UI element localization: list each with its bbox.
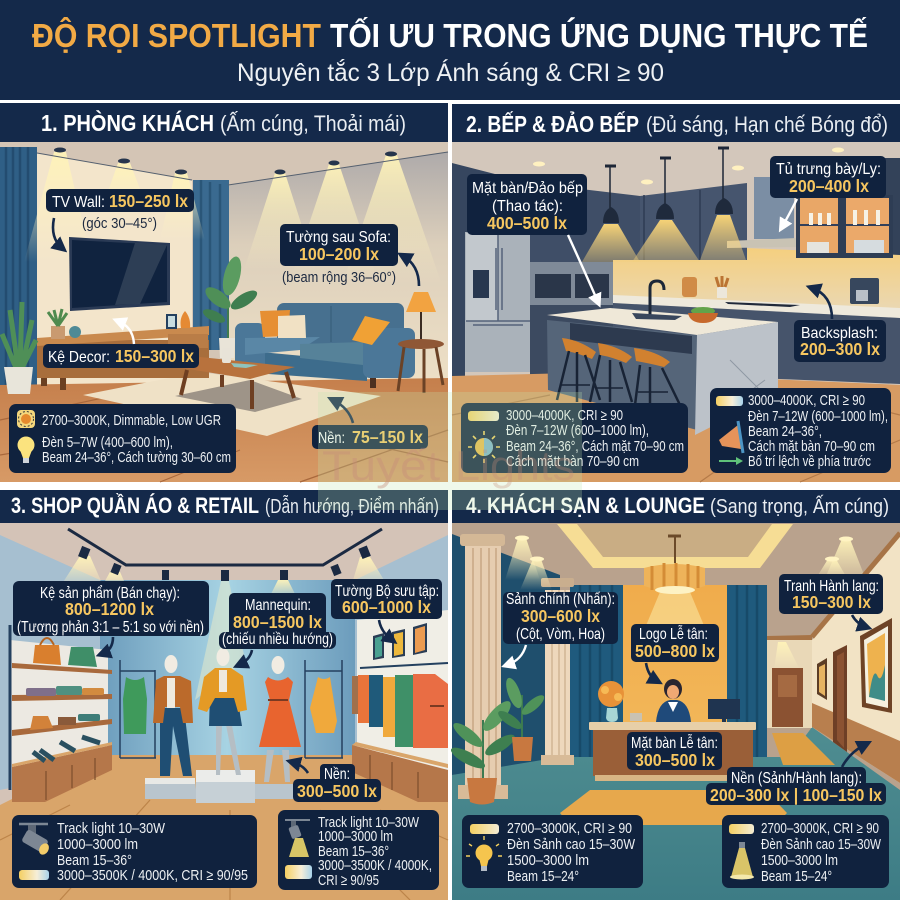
title: ĐỘ RỌI SPOTLIGHT <box>32 16 321 54</box>
info box 4 left: Đèn Sảnh cao 15–30W <box>507 836 636 853</box>
panel 2 header <box>452 104 900 142</box>
range hood <box>727 177 797 248</box>
reception desk <box>589 722 756 781</box>
label: reception desk: 300–500 lx <box>635 750 715 770</box>
info box 2 left: Cách mặtt bàn 70–90 cm <box>506 453 639 470</box>
info box 3 right: CRI ≥ 90/95 <box>318 872 379 889</box>
panel 1 header <box>0 103 448 142</box>
label: floor <box>312 425 428 449</box>
ceiling lights <box>533 148 844 184</box>
coffee table <box>175 348 302 412</box>
plant behind sofa <box>201 255 260 358</box>
arrow: display cabinet <box>782 199 797 227</box>
label: island top: 400–500 lx <box>487 213 567 233</box>
subtitle: Nguyên tắc 3 Lớp Ánh sáng & CRI ≥ 90 <box>237 58 664 87</box>
arrow: backsplash <box>812 288 832 319</box>
title <box>32 16 868 54</box>
label: display cabinet: 200–400 lx <box>789 176 869 196</box>
arrow: corridor art <box>852 615 866 627</box>
glass cabinet <box>796 195 893 258</box>
watermark <box>318 392 582 510</box>
info box 2 left: Đèn 7–12W (600–1000 lm), <box>506 422 649 439</box>
ceiling spots <box>505 536 870 590</box>
reception panel <box>623 585 727 722</box>
label: main lobby: Sảnh chính (Nhấn): <box>506 591 615 608</box>
walls <box>0 535 448 790</box>
icon: colour bar <box>729 824 754 834</box>
panel 1 header: (Ấm cúng, Thoải mái) <box>220 111 406 136</box>
info box 2 right <box>710 388 891 473</box>
label: TV wall: TV Wall: <box>52 194 105 211</box>
label: display cabinet <box>770 156 886 198</box>
clothes racks <box>120 660 343 758</box>
info box 2 right: Beam 24–36°, <box>748 423 822 440</box>
icon: track light <box>19 824 51 856</box>
label: backsplash: 200–300 lx <box>800 339 880 359</box>
island <box>547 308 778 435</box>
label: display cabinet: Tủ trưng bày/Ly: <box>776 161 881 178</box>
label: sofa wall: 100–200 lx <box>299 244 379 264</box>
label: decor shelf <box>43 344 199 368</box>
icon: spotlight beam <box>730 842 754 880</box>
info box 1: Beam 24–36°, Cách tường 30–60 cm <box>42 449 231 466</box>
info box 4 left: 2700–3000K, CRI ≥ 90 <box>507 820 632 837</box>
panel 3 header: 3. SHOP QUẦN ÁO & RETAIL <box>11 493 259 518</box>
label: decor shelf: 150–300 lx <box>115 346 194 366</box>
left wall <box>452 534 560 775</box>
watermark: Tuyết <box>322 442 440 489</box>
info box 2 left <box>461 403 688 473</box>
info box 2 left: Beam 24–36°, Cách mặt 70–90 cm <box>506 438 684 455</box>
shoe cabinet <box>12 737 112 802</box>
track rail and heads <box>58 529 390 700</box>
label: TV wall: 150–250 lx <box>109 191 188 211</box>
label: lobby floor: 200–300 lx | 100–150 lx <box>710 785 882 805</box>
info box 3 right: Track light 10–30W <box>318 814 420 831</box>
arrow: mannequin <box>239 650 252 665</box>
icon: beam angle <box>719 421 743 453</box>
ovens <box>530 262 613 375</box>
panel 3 header <box>0 490 448 523</box>
upper cabinets <box>452 158 900 376</box>
info box 3 left <box>12 815 257 888</box>
info box 2 right: 3000–4000K, CRI ≥ 90 <box>748 392 865 409</box>
label: main lobby <box>503 591 618 644</box>
label: floor: 75–150 lx <box>352 427 423 447</box>
label: product shelf: 800–1200 lx <box>65 599 154 619</box>
label: collection wall: 600–1000 lx <box>342 597 431 617</box>
label: mannequin: Mannequin: <box>245 597 311 614</box>
decor on console <box>48 309 190 339</box>
panel 1: living room <box>0 103 448 482</box>
icon: sun <box>468 431 500 463</box>
label: backsplash <box>794 320 886 362</box>
label: floor: Nền: <box>318 430 345 447</box>
info box 4 left: 1500–3000 lm <box>507 852 589 869</box>
lamp and side table <box>398 292 444 393</box>
icon: colour bar <box>285 865 312 879</box>
label: corridor art: 150–300 lx <box>792 592 871 612</box>
info box 4 left <box>462 815 643 888</box>
icon: colour bar <box>716 396 743 406</box>
info box 4 right <box>722 815 889 888</box>
info box 3 left: 1000–3000 lm <box>57 836 138 853</box>
panel 4 header <box>452 490 900 523</box>
hallway <box>767 533 900 783</box>
watermark: Lights <box>455 442 575 489</box>
columns <box>458 534 574 799</box>
curtains <box>570 585 767 757</box>
rug <box>560 790 787 825</box>
label: mannequin: 800–1500 lx <box>233 612 322 632</box>
label: corridor art <box>779 574 883 614</box>
label: product shelf <box>13 581 209 636</box>
flowers, phone, monitor <box>598 681 740 722</box>
TV console <box>37 326 209 390</box>
label: mannequin: (chiếu nhiều hướng) <box>222 631 333 648</box>
icon: bulb <box>466 836 502 871</box>
fridge <box>465 232 530 372</box>
floor <box>0 755 448 900</box>
label: sofa wall <box>280 224 398 286</box>
label: collection wall: Tường Bộ sưu tập: <box>335 583 439 600</box>
info box 1 <box>9 404 236 473</box>
arrow: lobby floor <box>842 744 866 767</box>
panel 1 header: 1. PHÒNG KHÁCH <box>41 109 214 136</box>
platforms <box>145 770 295 803</box>
label: decor shelf: Kệ Decor: <box>48 349 110 366</box>
label: reception logo <box>631 624 719 662</box>
floor <box>452 372 900 482</box>
label: reception desk: Mặt bàn Lễ tân: <box>631 733 718 752</box>
label: lobby floor <box>706 767 886 805</box>
wall art <box>373 623 427 660</box>
info box 1: 2700–3000K, Dimmable, Low UGR <box>42 412 221 429</box>
info box 3 right <box>278 810 439 890</box>
label: backsplash: Backsplash: <box>801 325 878 342</box>
icon: colour bar <box>470 824 499 834</box>
mannequin: man <box>153 655 193 776</box>
panel 2: kitchen <box>452 104 900 482</box>
backsplash items <box>682 276 879 304</box>
panel 2 header: 2. BẾP & ĐẢO BẾP <box>466 109 639 137</box>
arrow: product shelf <box>102 637 113 654</box>
pendant lights and beams <box>582 148 746 262</box>
info box 3 left: Track light 10–30W <box>57 820 166 837</box>
info box 3 right: 1000–3000 lm <box>318 828 393 845</box>
info box 4 right: Beam 15–24° <box>761 868 832 885</box>
label: island top: Mặt bàn/Đảo bếp <box>472 180 583 197</box>
title banner <box>0 0 900 100</box>
mannequin: centre <box>198 648 247 775</box>
label: shop floor <box>293 764 381 802</box>
icon: bulb <box>18 436 34 463</box>
label: main lobby: 300–600 lx <box>521 606 600 626</box>
bar stools <box>557 338 680 405</box>
info box 3 right: 3000–3500K / 4000K, <box>318 857 432 874</box>
label: product shelf: Kệ sản phẩm (Bán chạy): <box>40 584 180 602</box>
floor <box>0 378 448 482</box>
right clothes rail <box>352 663 448 748</box>
arrow: reception logo <box>646 663 657 681</box>
label: lobby floor: Nền (Sảnh/Hành lang): <box>731 770 862 787</box>
arrow: floor <box>333 400 353 423</box>
label: reception desk <box>627 732 722 770</box>
panel 4: hotel lobby <box>448 490 900 900</box>
panel 3 header: (Dẫn hướng, Điểm nhấn) <box>265 495 439 518</box>
label: reception logo: 500–800 lx <box>635 641 715 661</box>
backsplash <box>613 248 900 312</box>
arrow: main lobby <box>507 645 526 665</box>
info box 2 left: 3000–4000K, CRI ≥ 90 <box>506 407 623 424</box>
info box 1: Đèn 5–7W (400–600 lm), <box>42 434 173 451</box>
curtains <box>0 147 229 387</box>
arrow: shop floor <box>292 762 308 773</box>
label: sofa wall: (beam rộng 36–60°) <box>282 270 396 286</box>
label: shop floor: Nền: <box>324 766 350 783</box>
floor <box>452 727 900 900</box>
right cabinet <box>352 742 448 802</box>
plants <box>448 676 547 804</box>
arrow: decor shelf <box>118 321 134 344</box>
info box 3 left: Beam 15–36° <box>57 852 132 869</box>
faucet and bowl <box>632 281 718 323</box>
arrow: collection wall <box>379 620 392 640</box>
label: TV wall: (góc 30–45°) <box>82 216 157 232</box>
icon: track light beam <box>285 820 310 857</box>
icon: colour temperature <box>17 410 35 428</box>
label: reception logo: Logo Lễ tân: <box>639 624 708 643</box>
label: TV wall <box>46 189 194 232</box>
left shelving <box>10 625 112 790</box>
panel 4 header: 4. KHÁCH SẠN & LOUNGE <box>466 493 705 518</box>
arrow: sofa wall <box>403 256 419 286</box>
sofa <box>235 303 415 388</box>
label: collection wall <box>331 579 442 619</box>
arrow: island top <box>568 235 598 302</box>
mannequin: dress <box>259 656 301 782</box>
receptionist <box>656 679 691 722</box>
plant left <box>2 302 36 394</box>
label: shop floor: 300–500 lx <box>297 781 377 801</box>
label: sofa wall: Tường sau Sofa: <box>286 229 391 246</box>
label: main lobby: (Cột, Vòm, Hoa) <box>516 626 605 643</box>
countertop and base cabinets <box>613 295 900 384</box>
label: island top: (Thao tác): <box>492 198 563 215</box>
info box 3 left: 3000–3500K / 4000K, CRI ≥ 90/95 <box>57 867 248 884</box>
spotlights <box>24 148 442 285</box>
ceiling coffer <box>557 524 793 568</box>
info box 4 left: Beam 15–24° <box>507 868 579 885</box>
panel 3: retail shop <box>0 490 448 900</box>
icon: green arrow <box>719 457 743 465</box>
label: product shelf: (Tương phản 3:1 – 5:1 so với nền) <box>17 619 204 636</box>
label: island top <box>467 174 587 235</box>
pendant lamp <box>644 536 705 594</box>
arrow: TV wall <box>53 218 62 248</box>
label: mannequin <box>219 593 336 649</box>
rug <box>83 372 381 436</box>
info box 3 right: Beam 15–36° <box>318 843 389 860</box>
icon: colour bar <box>19 870 49 880</box>
TV <box>69 237 170 311</box>
info box 4 right: 1500–3000 lm <box>761 852 838 869</box>
icon: colour bar <box>468 411 499 421</box>
